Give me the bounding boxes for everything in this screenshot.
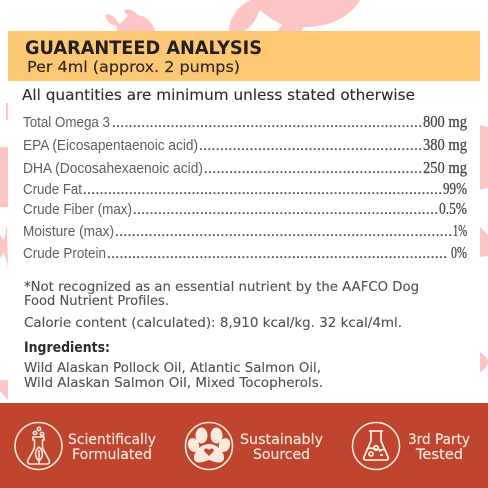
subtitle: Per 4ml (approx. 2 pumps) bbox=[27, 58, 240, 76]
row: total omega 3: Total Omega 3 bbox=[23, 114, 110, 131]
row: total omega 3: .......................................................................... bbox=[112, 115, 422, 131]
row: crude fat: 99% bbox=[443, 179, 467, 198]
AAFCO footnote bbox=[24, 279, 419, 309]
row: total omega 3: 800 mg bbox=[423, 112, 467, 131]
ingredients list: Wild Alaskan Pollock Oil, Atlantic Salmon Oil, bbox=[24, 360, 321, 376]
row: DHA: .................................................... bbox=[204, 161, 422, 177]
label: sustainably sourced: Sustainably bbox=[240, 432, 323, 448]
ingredients list bbox=[24, 360, 323, 391]
ingredients heading: Ingredients: bbox=[24, 340, 110, 356]
label: 3rd party tested bbox=[408, 432, 470, 463]
row: crude fiber: ......................................................................... bbox=[133, 202, 438, 218]
row: crude protein: Crude Protein bbox=[23, 245, 106, 262]
icon: flask with leaf bbox=[15, 422, 62, 470]
row: moisture bbox=[23, 221, 467, 240]
label: scientifically formulated: Scientifically bbox=[68, 432, 156, 448]
row: crude fiber: 0.5% bbox=[439, 199, 467, 218]
row: DHA bbox=[23, 158, 467, 177]
nutrient table bbox=[23, 112, 467, 262]
row: moisture: Moisture (max) bbox=[23, 223, 114, 240]
ingredients list: Wild Alaskan Salmon Oil, Mixed Tocopherols. bbox=[24, 375, 323, 391]
row: EPA: 380 mg bbox=[423, 135, 467, 154]
icon: test flask bbox=[352, 422, 400, 470]
calorie content: Calorie content (calculated): 8,910 kcal/kg. 32 kcal/4ml. bbox=[24, 315, 402, 331]
row: DHA: DHA (Docosahexaenoic acid) bbox=[23, 160, 203, 177]
label: scientifically formulated: Formulated bbox=[72, 447, 152, 463]
row: EPA: EPA (Eicosapentaenoic acid) bbox=[23, 137, 198, 154]
row: moisture: 1% bbox=[453, 221, 467, 240]
row: crude protein: ................................................................................. bbox=[107, 246, 447, 262]
row: crude fat bbox=[23, 179, 467, 198]
footer band bbox=[0, 403, 488, 488]
row: total omega 3 bbox=[23, 112, 467, 131]
row: crude fiber bbox=[23, 199, 467, 218]
row: moisture: ................................................................................ bbox=[115, 224, 452, 240]
AAFCO footnote: Food Nutrient Profiles. bbox=[24, 293, 169, 309]
row: crude fiber: Crude Fiber (max) bbox=[23, 201, 132, 218]
row: EPA bbox=[23, 135, 467, 154]
label: 3rd party tested: 3rd Party bbox=[408, 432, 470, 448]
row: crude protein bbox=[23, 243, 467, 262]
row: crude fat: ...................................................................................... bbox=[83, 182, 442, 198]
row: DHA: 250 mg bbox=[423, 158, 467, 177]
label: scientifically formulated bbox=[68, 432, 156, 463]
row: crude protein: 0% bbox=[451, 243, 467, 262]
label: sustainably sourced: Sourced bbox=[253, 447, 310, 463]
quantities note: All quantities are minimum unless stated otherwise bbox=[22, 86, 415, 104]
icon: paw with heart bbox=[186, 422, 232, 470]
row: crude fat: Crude Fat bbox=[23, 181, 83, 198]
label: sustainably sourced bbox=[240, 432, 323, 463]
label: 3rd party tested: Tested bbox=[415, 447, 463, 463]
row: EPA: ..................................................... bbox=[199, 138, 422, 154]
AAFCO footnote: *Not recognized as an essential nutrient by the AAFCO Dog bbox=[24, 279, 419, 295]
header band bbox=[8, 31, 480, 81]
title: GUARANTEED ANALYSIS bbox=[25, 38, 262, 59]
